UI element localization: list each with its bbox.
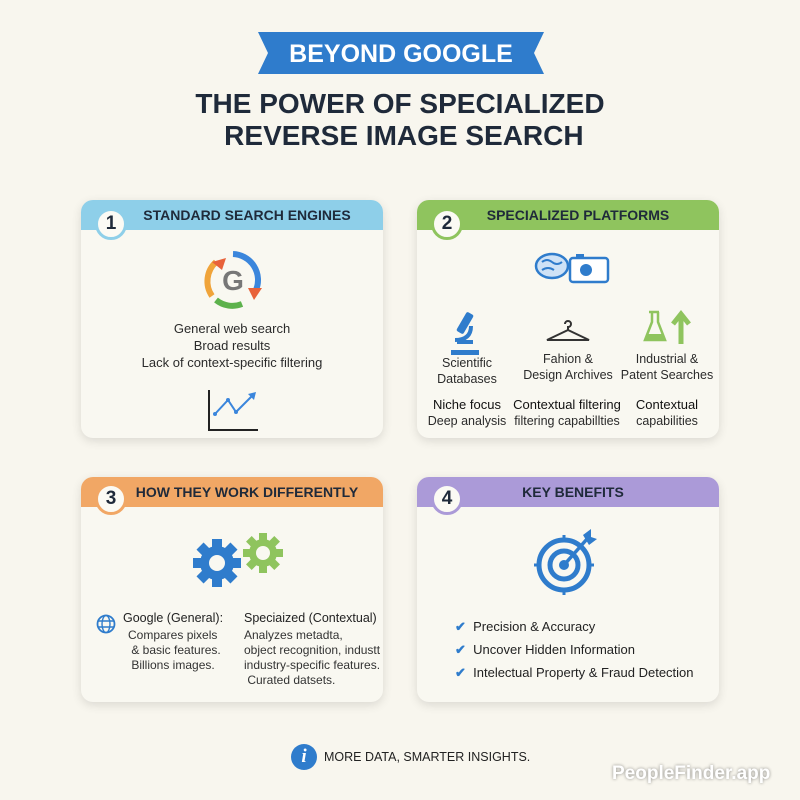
panel: specialized platforms [417, 200, 719, 438]
column: industrial: Industrial & [636, 352, 698, 366]
text: specialized contextual: Analyzes metadta, [244, 628, 343, 642]
text: google general: Google (General): [123, 611, 223, 625]
list: benefits: ✔ Uncover Hidden Information [455, 642, 635, 657]
column: industrial: Patent Searches [621, 368, 713, 382]
text: google general: Compares pixels [128, 628, 217, 642]
column: fashion: Fahion & [543, 352, 593, 366]
icon: target [534, 529, 597, 595]
text: specialized contextual: industry-specific features. [244, 658, 380, 672]
badge 4 [431, 483, 463, 515]
watermark: PeopleFinder.app [612, 763, 770, 784]
header 1: STANDARD SEARCH ENGINES [143, 207, 351, 223]
text: standard features [142, 321, 322, 370]
list: benefits: ✔ Precision & Accuracy [455, 619, 595, 634]
text: standard features: Lack of context-specific filtering [142, 355, 322, 370]
column: fashion: Contextual filtering [513, 397, 621, 412]
header 4: KEY BENEFITS [522, 484, 624, 500]
header 3 [81, 477, 383, 507]
column: fashion [513, 320, 621, 428]
text: specialized contextual: object recognition, industt [244, 643, 380, 657]
header 4 [417, 477, 719, 507]
column: scientific: Databases [437, 372, 497, 386]
column: industrial: Contextual [636, 397, 698, 412]
badge 1 [95, 208, 127, 240]
panel: key benefits [417, 477, 719, 702]
badge 1: 1 [106, 213, 116, 234]
badge 4: 4 [442, 488, 452, 509]
text: google general: & basic features. [131, 643, 221, 657]
header 2: SPECIALIZED PLATFORMS [487, 207, 669, 223]
column: industrial [621, 310, 713, 428]
banner: Beyond Google: BEYOND GOOGLE [289, 40, 513, 68]
column: scientific: Deep analysis [428, 414, 506, 428]
icon: google cycle: G [222, 265, 244, 296]
text: specialized contextual: Speciaized (Contextual) [244, 611, 377, 625]
column: scientific: Niche focus [433, 397, 501, 412]
text: google general [123, 611, 223, 672]
column: scientific: Scientific [442, 356, 492, 370]
badge 2 [431, 208, 463, 240]
title: THE POWER OF SPECIALIZED [195, 88, 605, 119]
text: specialized contextual: Curated datsets. [247, 673, 335, 687]
footer: info note: i [301, 746, 307, 767]
footer: info note: MORE DATA, SMARTER INSIGHTS. [324, 750, 530, 764]
title: REVERSE IMAGE SEARCH [224, 120, 584, 151]
text: standard features: Broad results [194, 338, 270, 353]
list: benefits [455, 619, 694, 680]
list: benefits: ✔ Intelectual Property & Fraud Detection [455, 665, 694, 680]
header 2 [417, 200, 719, 230]
panel: standard search engines [81, 200, 383, 438]
icon: brain camera [534, 252, 610, 284]
column: fashion: Design Archives [523, 368, 613, 382]
header 1 [81, 200, 383, 230]
icon: google cycle [204, 251, 262, 309]
badge 2: 2 [442, 213, 452, 234]
footer: info note [291, 744, 530, 770]
text: google general: Billions images. [131, 658, 215, 672]
panel: how they work differently [81, 477, 383, 702]
badge 3: 3 [106, 488, 116, 509]
badge 3 [95, 483, 127, 515]
column: industrial: capabilities [636, 414, 698, 428]
column: scientific [428, 312, 506, 428]
header 3: HOW THEY WORK DIFFERENTLY [136, 484, 358, 500]
title [195, 88, 605, 151]
icon: gears [193, 533, 283, 587]
column: fashion: filtering capabillties [514, 414, 620, 428]
icon: line chart [208, 390, 258, 431]
text: standard features: General web search [174, 321, 290, 336]
banner: Beyond Google [258, 32, 544, 74]
icon: globe [96, 614, 116, 634]
text: specialized contextual [244, 611, 380, 687]
